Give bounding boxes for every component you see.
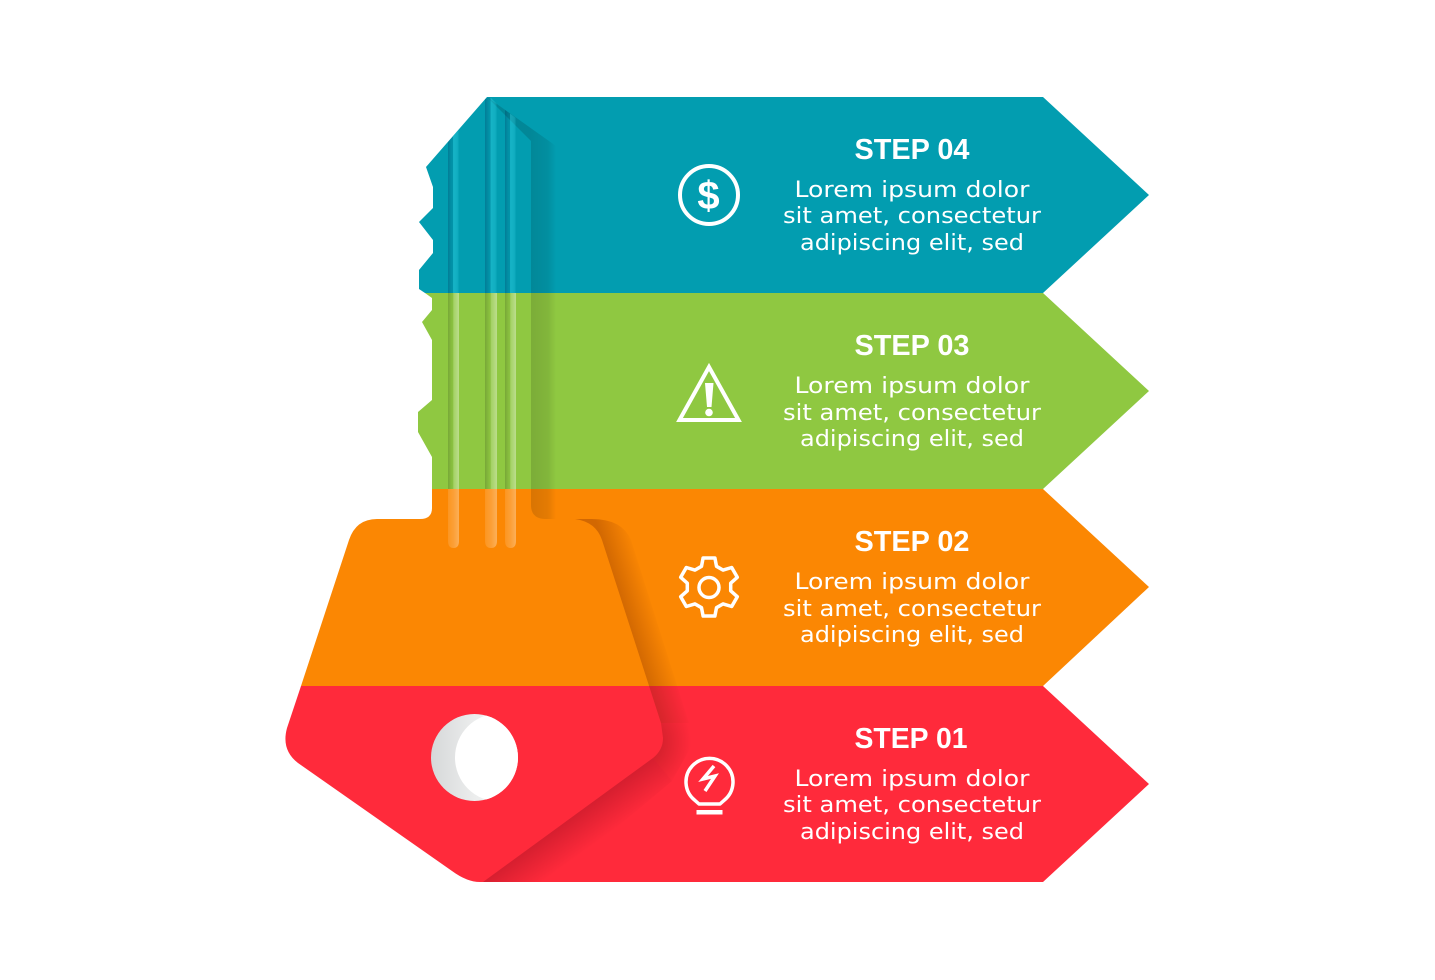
key blade shadow — [487, 97, 556, 519]
panel: step 02 band (orange) — [301, 489, 1149, 686]
panel: step 04 band (teal) — [419, 97, 1149, 293]
icon: warning triangle — [680, 367, 738, 420]
text: step 03 description: adipiscing elit, sed — [800, 427, 1024, 452]
text: step 01 description: adipiscing elit, sed — [800, 820, 1024, 845]
step 04 content — [680, 134, 1042, 256]
icon: dollar coin — [680, 166, 738, 224]
key hole — [431, 714, 518, 801]
step 03 content — [680, 330, 1042, 452]
text: step 03 description — [783, 374, 1042, 452]
text: step 01 description: Lorem ipsum dolor — [794, 767, 1031, 792]
icon: dollar coin: $ — [697, 174, 720, 218]
step 02 content — [681, 526, 1042, 648]
text: step 02 description — [783, 570, 1042, 648]
text: step 01 description — [783, 767, 1042, 845]
key head shadow — [483, 519, 692, 882]
step 01 content — [686, 723, 1042, 845]
heading: step 01: STEP 01 — [854, 723, 968, 755]
text: step 01 description: sit amet, consectetur — [783, 793, 1042, 818]
icon: gear — [681, 558, 737, 616]
text: step 03 description: sit amet, consectetur — [783, 401, 1042, 426]
text: step 02 description: Lorem ipsum dolor — [794, 570, 1031, 595]
text: step 04 description: sit amet, consectetur — [783, 204, 1042, 229]
heading: step 02: STEP 02 — [854, 526, 970, 558]
key blade grooves — [448, 97, 516, 548]
text: step 04 description — [783, 178, 1042, 256]
text: step 02 description: sit amet, consectetur — [783, 597, 1042, 622]
text: step 02 description: adipiscing elit, sed — [800, 623, 1024, 648]
heading: step 03: STEP 03 — [854, 330, 970, 362]
text: step 03 description: Lorem ipsum dolor — [794, 374, 1031, 399]
text: step 04 description: Lorem ipsum dolor — [794, 178, 1031, 203]
panel: step 01 band (red) — [285, 686, 1149, 882]
heading: step 04: STEP 04 — [854, 134, 970, 166]
icon: light bulb — [686, 758, 733, 814]
panel: step 03 band (green) — [418, 293, 1149, 489]
text: step 04 description: adipiscing elit, sed — [800, 231, 1024, 256]
